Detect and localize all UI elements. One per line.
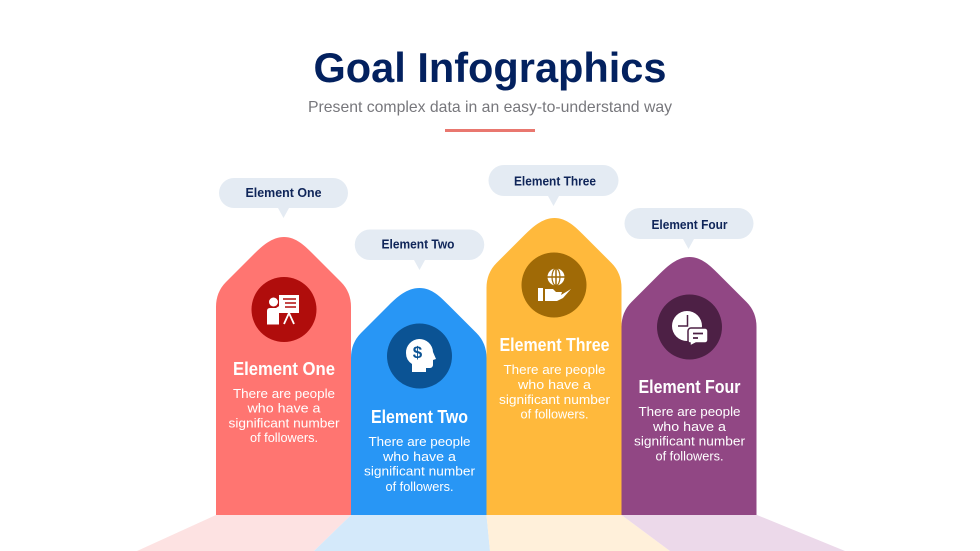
description (228, 386, 340, 445)
arrow card four (622, 257, 756, 515)
description: There are people (368, 434, 470, 449)
callout: element one (219, 178, 348, 218)
description: significant number (364, 464, 476, 478)
title: Goal Infographics (314, 44, 666, 91)
floor perspective bands (137, 515, 845, 551)
description: There are people (504, 362, 606, 377)
description: who have a (382, 449, 457, 464)
panel: element two (351, 288, 486, 515)
callout: element two (355, 230, 484, 270)
icon: presenter at board (252, 277, 316, 342)
icon: clock with chat bubble (657, 294, 722, 360)
heading: Element Two (371, 407, 468, 427)
callout: element three: Element Three (514, 174, 596, 188)
panel: element four (622, 257, 756, 515)
description: of followers. (386, 479, 454, 494)
icon: hand holding globe (522, 252, 586, 318)
callout: element one: Element One (246, 185, 322, 200)
description: significant number (228, 416, 340, 430)
panel: element one (216, 237, 351, 515)
callout: element four (624, 208, 754, 249)
icon: head with dollar: $ (413, 343, 423, 362)
callout: element four: Element Four (652, 217, 728, 232)
description: of followers. (520, 406, 588, 422)
arrow card three (486, 218, 622, 515)
description (634, 404, 746, 464)
heading: Element Three (500, 335, 610, 355)
callout: element three (488, 165, 618, 206)
description (364, 434, 476, 494)
description: of followers. (656, 448, 724, 464)
accent underline (445, 129, 535, 132)
heading: Element Four (638, 377, 740, 397)
description: There are people (638, 404, 740, 419)
description: of followers. (250, 430, 318, 445)
description: who have a (652, 419, 727, 434)
heading: Element One (233, 359, 335, 379)
arrow card one (216, 237, 351, 515)
description: significant number (499, 392, 611, 407)
description: who have a (517, 377, 592, 392)
panel: element three (486, 218, 622, 515)
callout: element two: Element Two (382, 236, 455, 252)
description: There are people (233, 386, 335, 401)
subtitle: Present complex data in an easy-to-understand way (308, 99, 672, 116)
description (499, 362, 611, 422)
icon: head with dollar (387, 324, 452, 388)
description: who have a (246, 400, 321, 416)
description: significant number (634, 434, 746, 448)
arrow card two (351, 288, 486, 515)
